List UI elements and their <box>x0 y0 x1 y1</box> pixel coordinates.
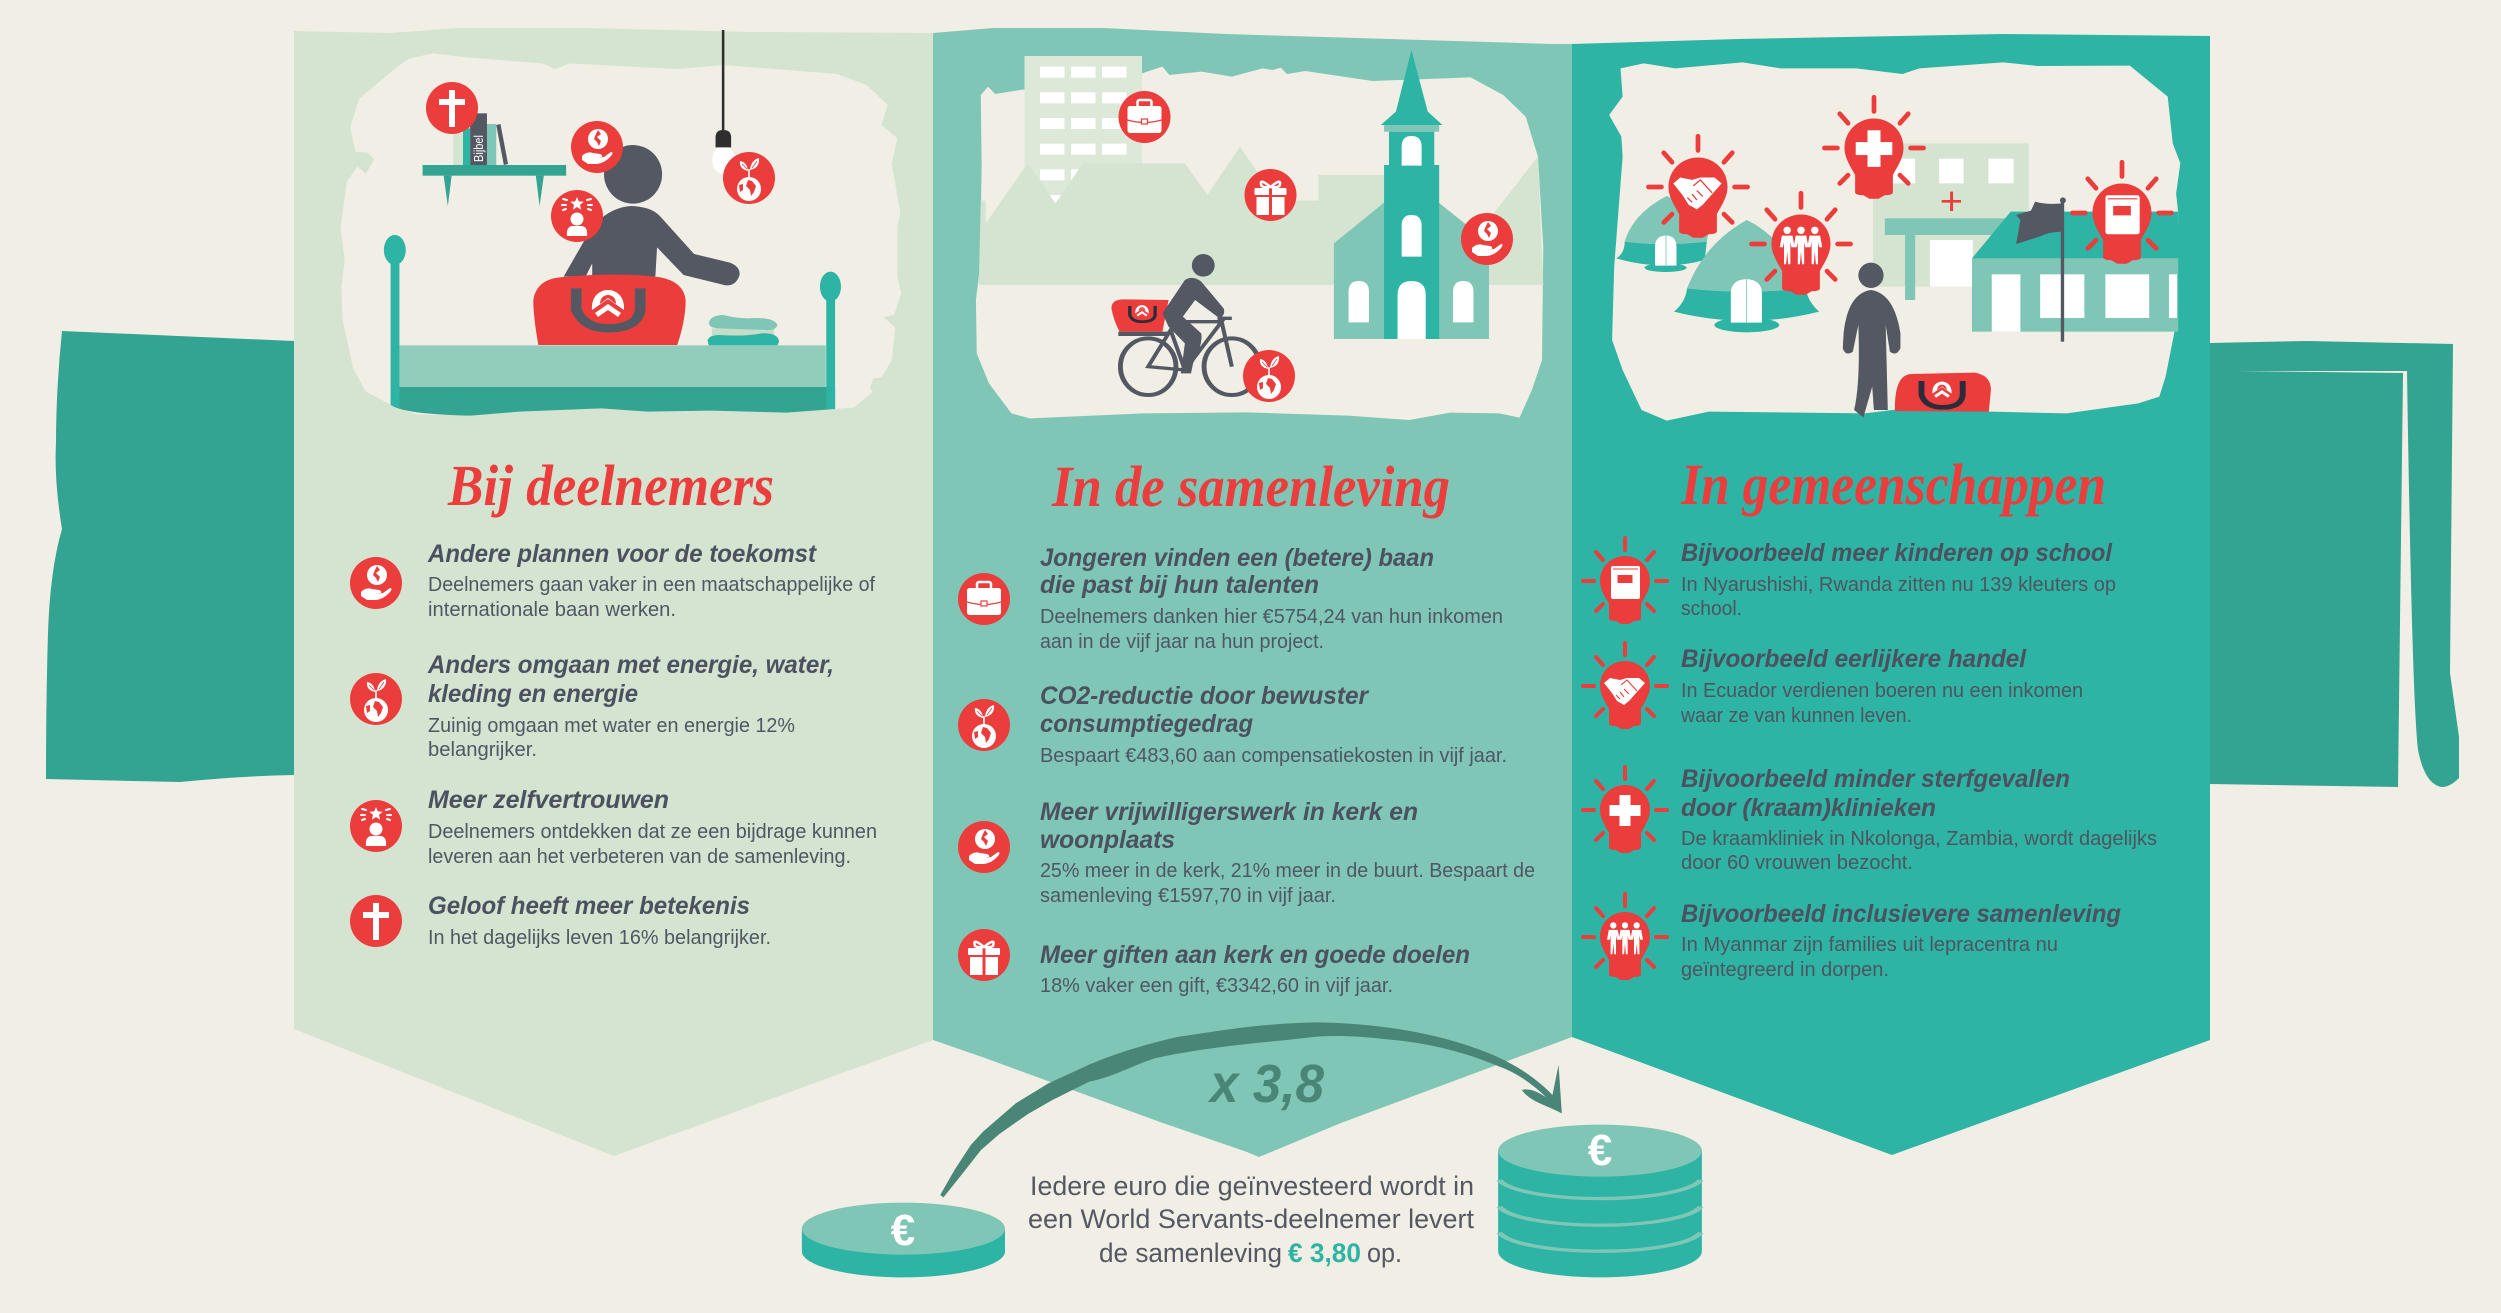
list item: andere plannen: Deelnemers gaan vaker in een maatschappelijke of <box>428 574 875 596</box>
icon: gift bubble <box>1244 169 1296 221</box>
icon: hand with globe bubble <box>571 121 623 173</box>
text: conclusion: een World Servants-deelnemer levert <box>1028 1204 1474 1234</box>
icon: people bulb <box>1751 193 1851 295</box>
heading: In gemeenschappen: In gemeenschappen <box>1680 452 2106 517</box>
list item: vrijwilligerswerk: samenleving €1597,70 in vijf jaar. <box>1040 885 1336 907</box>
icon: seedling globe bubble bike <box>1243 350 1295 402</box>
text: conclusion <box>1028 1171 1474 1268</box>
list item: school <box>1583 538 2116 624</box>
list item: klinieken: door (kraam)klinieken <box>1681 794 1936 822</box>
small bag logo in village <box>1932 382 1952 398</box>
left folded wing <box>46 331 294 782</box>
list item: anders omgaan: belangrijker. <box>428 739 537 761</box>
list item: school: school. <box>1681 598 1742 620</box>
list item: school: Bijvoorbeeld meer kinderen op school <box>1681 539 2113 567</box>
list item: inclusie: Bijvoorbeeld inclusievere samenleving <box>1681 900 2121 928</box>
list item: anders omgaan: Zuinig omgaan met water en energie 12% <box>428 715 795 737</box>
icon: briefcase bubble <box>1118 91 1170 143</box>
text: conclusion: op. <box>1367 1238 1402 1268</box>
icon: plus bulb <box>1824 97 1924 199</box>
icon: handshake bulb <box>1648 136 1748 238</box>
list item: klinieken <box>1583 765 2157 874</box>
list item: geloof: Geloof heeft meer betekenis <box>428 892 750 920</box>
list item: inclusie <box>1583 894 2121 981</box>
panel: bij deelnemers <box>294 28 933 1156</box>
list item: jongeren: aan in de vijf jaar na hun project. <box>1040 631 1324 653</box>
list item: inclusie: In Myanmar zijn families uit lepracentra nu <box>1681 934 2058 956</box>
list item: school: In Nyarushishi, Rwanda zitten nu 139 kleuters op <box>1681 574 2116 596</box>
icon: confidence bubble <box>551 190 603 242</box>
list item: zelfvertrouwen: Meer zelfvertrouwen <box>428 786 669 814</box>
list item: andere plannen <box>350 540 875 621</box>
icon: book bulb <box>2072 162 2172 264</box>
icon: single coin: € <box>891 1206 915 1255</box>
list item: giften: Meer giften aan kerk en goede doelen <box>1040 941 1470 969</box>
text: conclusion: de samenleving <box>1099 1238 1282 1268</box>
list item: andere plannen: Andere plannen voor de toekomst <box>427 540 818 568</box>
arrow: from one coin to stack <box>940 1022 1562 1197</box>
panel: in de samenleving <box>933 28 1572 1157</box>
heading: In de samenleving: In de samenleving <box>1051 454 1450 519</box>
panel: in gemeenschappen <box>1572 34 2210 1155</box>
small bag logo on bike <box>1135 305 1149 316</box>
illustration: person packing on bed <box>341 30 901 416</box>
icon: cross bubble <box>426 82 478 134</box>
illustration: cyclist, city and church <box>976 50 1543 420</box>
multiplier: x 3,8: x 3,8 <box>1207 1054 1324 1114</box>
list item: jongeren: Deelnemers danken hier €5754,24 van hun inkomen <box>1040 606 1503 628</box>
list item: anders omgaan: kleding en energie <box>428 680 638 708</box>
list item: klinieken: De kraamkliniek in Nkolonga, Zambia, wordt dagelijks <box>1681 828 2157 850</box>
list item: CO2-reductie: Bespaart €483,60 aan compensatiekosten in vijf jaar. <box>1040 745 1507 767</box>
list item: handel: In Ecuador verdienen boeren nu een inkomen <box>1681 680 2083 702</box>
list item: jongeren: die past bij hun talenten <box>1040 571 1319 599</box>
bag logo <box>592 290 624 317</box>
list item: giften <box>958 929 1470 997</box>
list item: jongeren <box>958 544 1503 653</box>
right folded wing <box>2210 341 2459 787</box>
list item: jongeren: Jongeren vinden een (betere) baan <box>1040 544 1434 572</box>
list item: andere plannen: internationale baan werken. <box>428 599 676 621</box>
list item: vrijwilligerswerk <box>958 798 1535 907</box>
icon: seedling globe bubble <box>723 152 775 204</box>
list item: giften: 18% vaker een gift, €3342,60 in vijf jaar. <box>1040 975 1393 997</box>
icon: single coin <box>802 1203 1005 1277</box>
list item: vrijwilligerswerk: Meer vrijwilligerswerk in kerk en <box>1040 798 1418 826</box>
text: conclusion: Iedere euro die geïnvesteerd wordt in <box>1030 1171 1474 1201</box>
list item: inclusie: geïntegreerd in dorpen. <box>1681 959 1889 981</box>
list item: zelfvertrouwen: Deelnemers ontdekken dat ze een bijdrage kunnen <box>428 821 877 843</box>
book title: Bijbel: Bijbel <box>471 135 486 162</box>
heading: Bij deelnemers: Bij deelnemers <box>447 453 774 518</box>
illustration: community village <box>1609 62 2180 421</box>
icon: coin stack <box>1498 1125 1702 1277</box>
list item: handel: waar ze van kunnen leven. <box>1680 705 1912 727</box>
list item: klinieken: Bijvoorbeeld minder sterfgevallen <box>1681 765 2070 793</box>
text: conclusion: € 3,80 <box>1288 1238 1361 1268</box>
list item: zelfvertrouwen: leveren aan het verbeteren van de samenleving. <box>428 846 851 868</box>
list item: geloof <box>350 892 771 949</box>
list item: handel: Bijvoorbeeld eerlijkere handel <box>1681 645 2027 673</box>
list item: CO2-reductie: CO2-reductie door bewuster <box>1040 682 1369 710</box>
list item: CO2-reductie <box>958 682 1507 767</box>
list item: zelfvertrouwen <box>350 786 877 868</box>
list item: geloof: In het dagelijks leven 16% belangrijker. <box>428 927 771 949</box>
list item: CO2-reductie: consumptiegedrag <box>1040 710 1253 738</box>
icon: hand with globe bubble church <box>1461 213 1513 265</box>
list item: klinieken: door 60 vrouwen bezocht. <box>1681 852 1913 874</box>
list item: vrijwilligerswerk: woonplaats <box>1040 826 1175 854</box>
list item: vrijwilligerswerk: 25% meer in de kerk, 21% meer in de buurt. Bespaart de <box>1040 860 1535 882</box>
list item: anders omgaan <box>350 651 834 761</box>
list item: anders omgaan: Anders omgaan met energie, water, <box>427 651 834 679</box>
icon: coin stack: € <box>1588 1126 1612 1175</box>
list item: handel <box>1583 643 2083 729</box>
